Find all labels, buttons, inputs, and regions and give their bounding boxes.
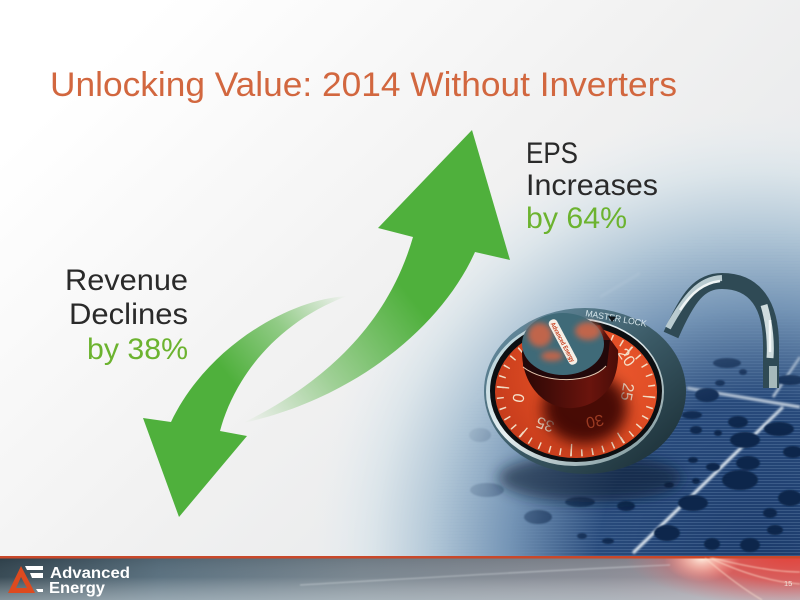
page number: 15 [784,579,792,588]
knob label: Advanced Energy [549,321,576,364]
dial rim [490,320,662,462]
label: EPS increases by 64% [526,137,658,235]
label: revenue declines by 38%: Revenue [65,264,188,297]
dial numbers [510,346,638,435]
footer bar [0,556,800,600]
dial pointer [608,316,616,322]
knob rim line [523,366,606,380]
dial ticks [500,331,652,453]
label: EPS increases by 64%: Increases [526,169,658,202]
solar panel photo texture [470,354,800,556]
lock body [484,308,686,474]
logo wordmark: Advanced [50,565,130,582]
arrow: EPS up [243,130,510,423]
orange dial [495,326,657,458]
knob top [522,313,604,375]
footer accent line [0,556,800,558]
logo: Advanced Energy: Energy [49,580,105,597]
dial numbers: 0 [510,392,529,404]
dial number 30 in shadow: 30 [584,410,605,431]
logo mark [8,566,43,593]
dial numbers: 25 [617,382,636,402]
label: revenue declines by 38% [65,264,188,366]
dial numbers: 35 [534,413,557,435]
knob shadow [543,372,627,444]
logo: Advanced Energy [8,565,130,597]
label: revenue declines by 38%: Declines [69,298,188,331]
knob side [522,325,618,408]
label: revenue declines by 38%: by 38% [87,333,188,366]
photo colour wash [300,110,800,560]
lock brand text: MASTER LOCK [585,308,647,329]
icon: open combination padlock [484,278,773,502]
lock shadow [498,454,682,502]
label: EPS increases by 64%: by 64% [526,202,627,235]
title: Unlocking Value: 2014 Without Inverters [50,66,677,104]
dial numbers: 20 [614,346,638,370]
knob skirt [523,340,610,380]
arrow: revenue down [143,296,347,517]
lock shackle [668,278,773,388]
label: EPS increases by 64%: EPS [526,137,578,170]
chrome ring [486,318,664,466]
footer light streaks [300,558,800,600]
